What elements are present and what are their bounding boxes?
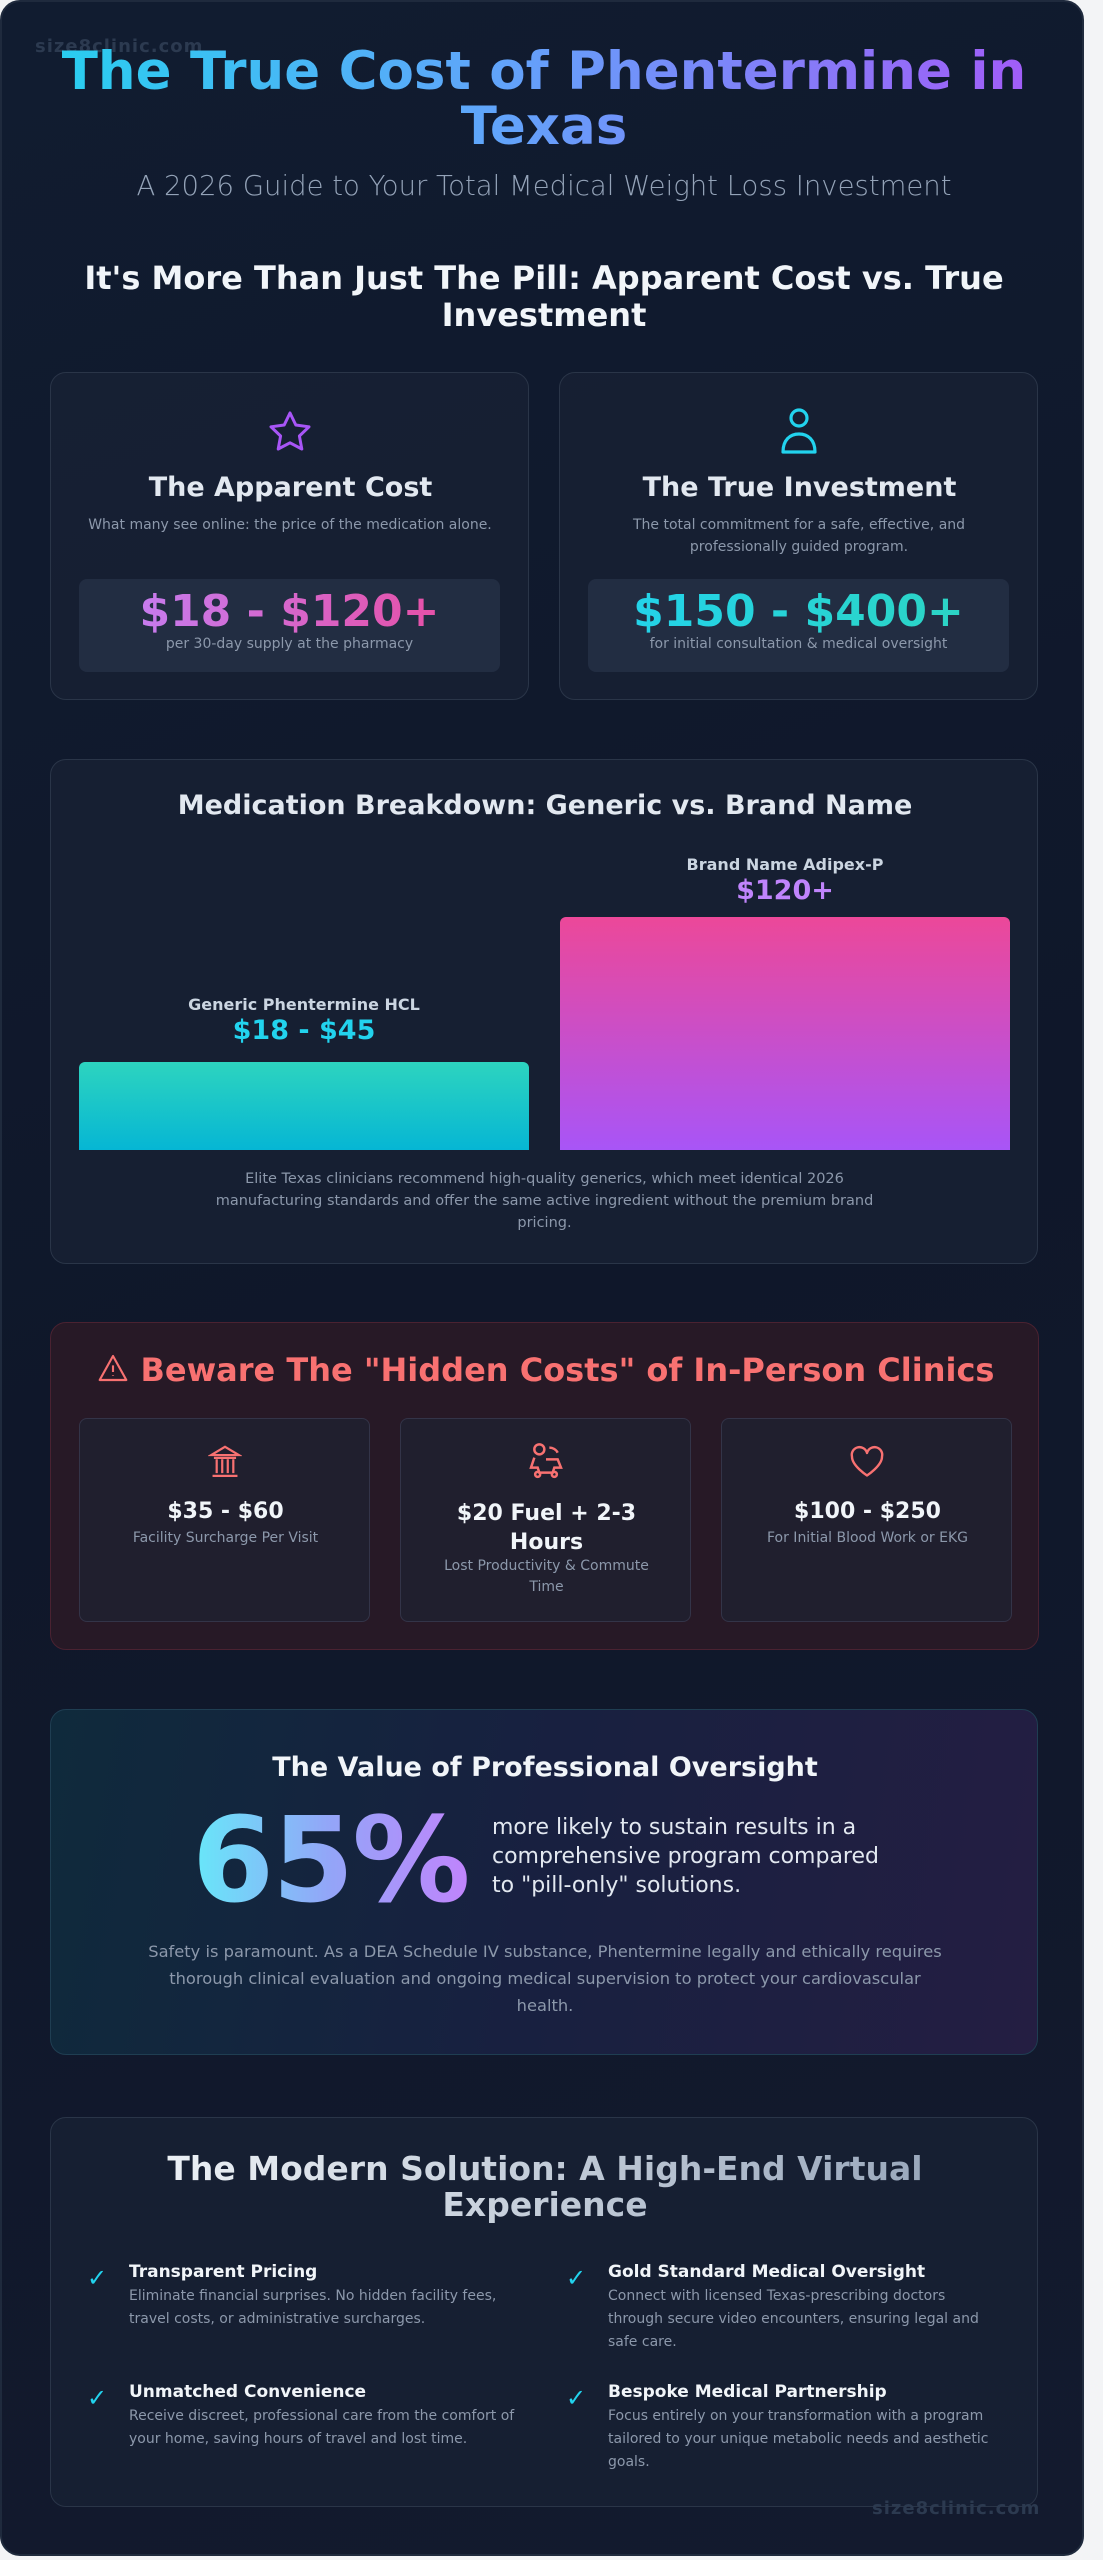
caption: Safety is paramount. As a DEA Schedule IV substance, Phentermine legally and ethically requires thorough clinical evaluation and ongoing medical supervision to protect your cardiovascular health. [148, 1942, 942, 2015]
bar: generic: $18 - $45 [233, 1015, 375, 1046]
title: The True Cost of Phentermine in [62, 41, 1026, 102]
sub-card: facility: $35 - $60 [167, 1499, 284, 1524]
price box: per 30-day supply at the pharmacy [166, 636, 413, 652]
bar: brand: $120+ [736, 875, 834, 906]
heading: Medication Breakdown: Generic vs. Brand Name [178, 790, 912, 821]
sub-card: facility [79, 1418, 370, 1622]
item: convenience: ✓ [87, 2384, 107, 2412]
bar: brand: Brand Name Adipex-P [687, 855, 883, 874]
icon: star [269, 411, 310, 451]
price box: $18 - $120+ [139, 586, 440, 637]
sub-card: fuel: $20 Fuel + 2-3 [457, 1501, 636, 1526]
item: convenience: Receive discreet, professional care from the comfort of your home, saving hours of travel and lost time. [129, 2408, 514, 2447]
watermark bottom: size8clinic.com [872, 2498, 1040, 2519]
item: gold standard: ✓ [566, 2264, 586, 2292]
stat text: more likely to sustain results in a comprehensive program compared to "pill-only" solutions. [492, 1815, 879, 1898]
section heading: apparent vs true: It's More Than Just The Pill: Apparent Cost vs. True Investment [84, 259, 1004, 334]
icon: building [208, 1446, 242, 1477]
big stat: 65% [192, 1791, 468, 1929]
bar: generic: Generic Phentermine HCL [188, 995, 420, 1014]
item: convenience [87, 2382, 514, 2447]
price box: $150 - $400+ [633, 586, 964, 637]
item: transparent pricing [87, 2262, 496, 2327]
price box: for initial consultation & medical oversight [650, 636, 947, 652]
panel: professional oversight [50, 1709, 1038, 2055]
card title: The Apparent Cost [149, 472, 432, 503]
icon: person [781, 408, 817, 454]
card desc: The total commitment for a safe, effective, and professionally guided program. [633, 517, 965, 555]
panel: hidden costs [50, 1322, 1039, 1650]
icon: commute [529, 1443, 563, 1478]
card title: The True Investment [643, 472, 956, 503]
item: bespoke: Focus entirely on your transformation with a program tailored to your unique metabolic needs and aesthetic goals. [608, 2408, 988, 2470]
item: transparent pricing: Eliminate financial surprises. No hidden facility fees, travel costs, or administrative surcharges. [129, 2288, 496, 2327]
panel: true investment [559, 372, 1038, 700]
item: transparent pricing: Transparent Pricing [129, 2262, 317, 2282]
price box [588, 579, 1009, 672]
heading with warning icon: Beware The "Hidden Costs" of In-Person Clinics [141, 1351, 994, 1389]
sub-card: fuel: Lost Productivity & Commute Time [444, 1558, 649, 1595]
panel: modern solution [50, 2117, 1038, 2507]
item: gold standard: Connect with licensed Texas-prescribing doctors through secure video encounters, ensuring legal and safe care. [608, 2288, 979, 2350]
bar chart [79, 855, 1010, 1150]
bar: brand [560, 855, 1010, 1150]
panel: apparent cost [50, 372, 529, 700]
title: Texas [461, 96, 627, 157]
sub-card: blood work: $100 - $250 [794, 1499, 941, 1524]
bar: generic [79, 995, 529, 1150]
item: bespoke [566, 2382, 988, 2470]
title [2, 44, 1086, 154]
sub-card: blood work [721, 1418, 1012, 1622]
heading: The Value of Professional Oversight [272, 1752, 818, 1783]
item: bespoke: Bespoke Medical Partnership [608, 2382, 887, 2402]
item: convenience: Unmatched Convenience [129, 2382, 366, 2402]
sub-card: fuel [400, 1418, 691, 1622]
sub-card: blood work: For Initial Blood Work or EKG [767, 1530, 968, 1546]
panel: medication breakdown [50, 759, 1038, 1264]
card desc: What many see online: the price of the medication alone. [88, 517, 492, 533]
item: transparent pricing: ✓ [87, 2264, 107, 2292]
sub-card: fuel: Hours [510, 1530, 583, 1555]
sub-card: facility: Facility Surcharge Per Visit [133, 1530, 318, 1546]
subtitle: A 2026 Guide to Your Total Medical Weight Loss Investment [136, 170, 952, 202]
item: bespoke: ✓ [566, 2384, 586, 2412]
price box [79, 579, 500, 672]
heading: The Modern Solution: A High-End Virtual Experience [167, 2149, 923, 2224]
item: gold standard [566, 2262, 979, 2350]
icon: heart [850, 1446, 884, 1477]
watermark top: size8clinic.com [35, 36, 203, 57]
caption: Elite Texas clinicians recommend high-quality generics, which meet identical 2026 manufacturing standards and offer the same active ingredient without the premium brand pricing. [216, 1171, 873, 1231]
item: gold standard: Gold Standard Medical Oversight [608, 2262, 925, 2282]
